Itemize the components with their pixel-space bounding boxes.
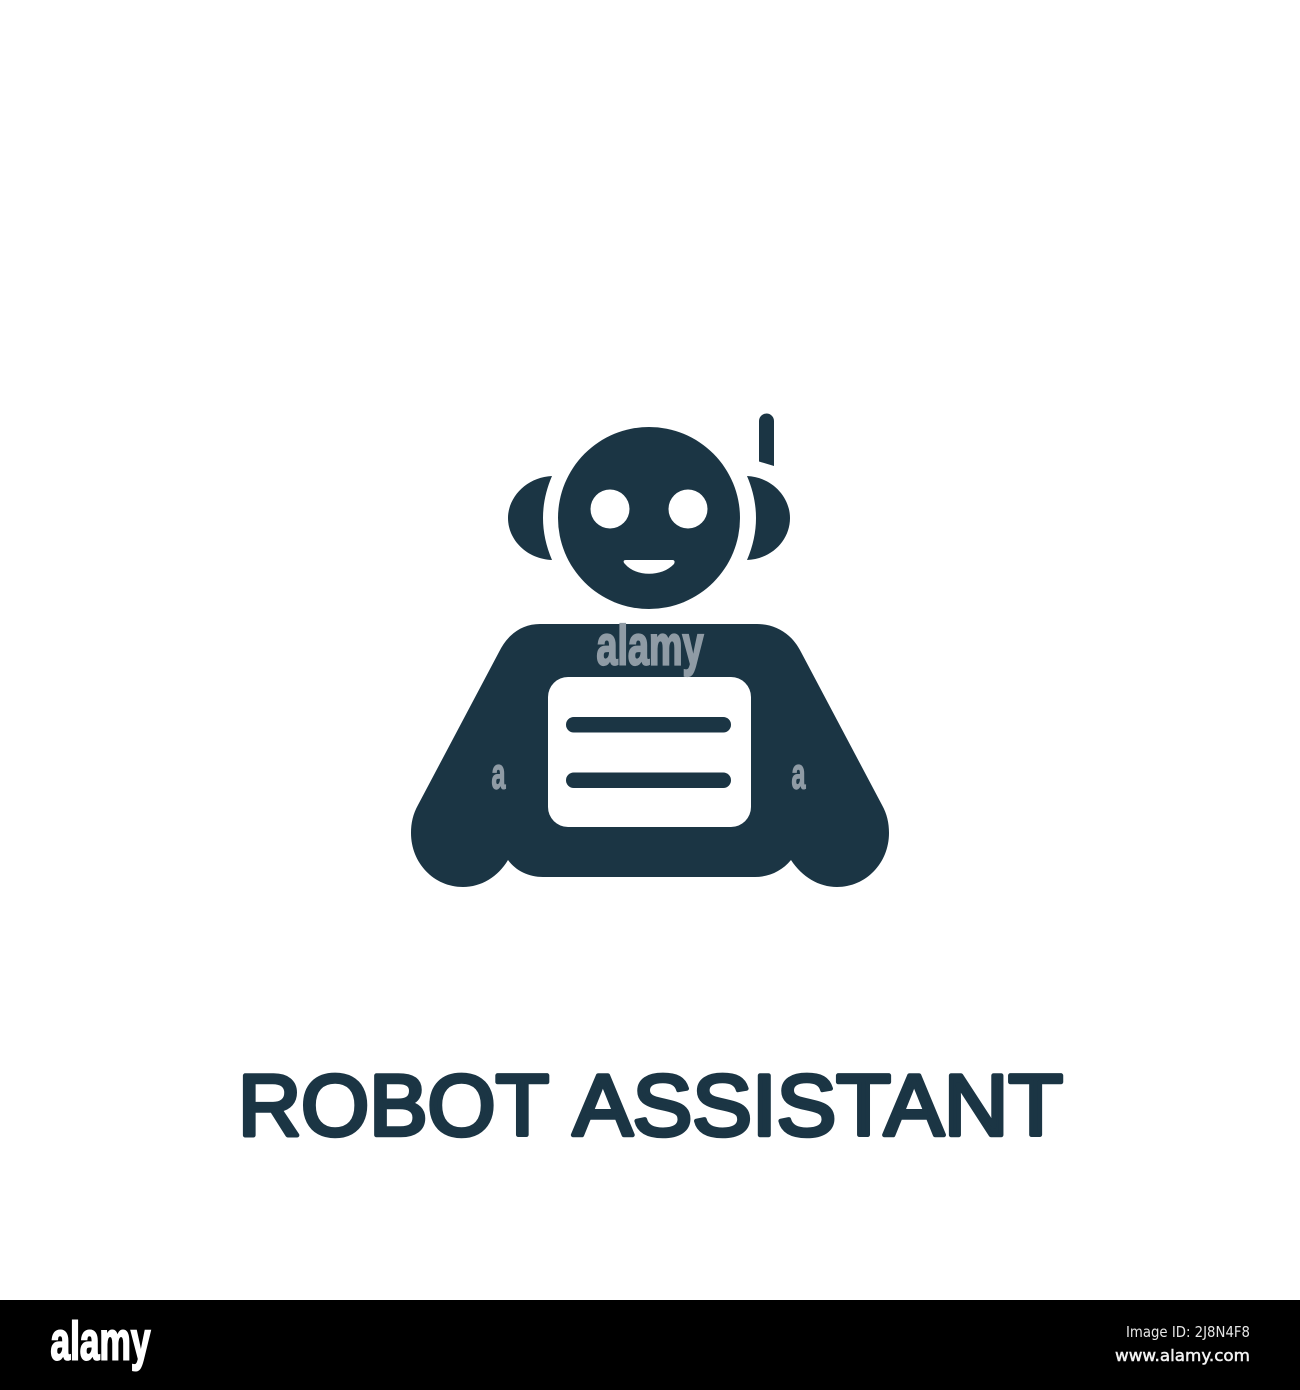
footer bar <box>0 1300 1300 1390</box>
robot right ear <box>747 476 790 560</box>
title: ASSISTANT <box>573 1058 1063 1154</box>
robot head <box>558 427 740 609</box>
robot left ear <box>508 476 552 560</box>
robot chest panel <box>548 677 751 827</box>
title <box>238 1058 1063 1154</box>
robot body <box>411 624 889 887</box>
watermark: centre alamy: alamy <box>596 614 704 676</box>
watermark: left letter: a <box>492 750 506 798</box>
icon: robot assistant <box>411 414 889 887</box>
title: ROBOT <box>238 1058 549 1154</box>
robot antenna <box>759 414 774 466</box>
watermark: right letter: a <box>792 750 806 798</box>
image id: Image ID: 2J8N4F8 <box>1126 1323 1250 1341</box>
footer logo: alamy <box>50 1312 150 1372</box>
website: www.alamy.com <box>1115 1346 1250 1365</box>
